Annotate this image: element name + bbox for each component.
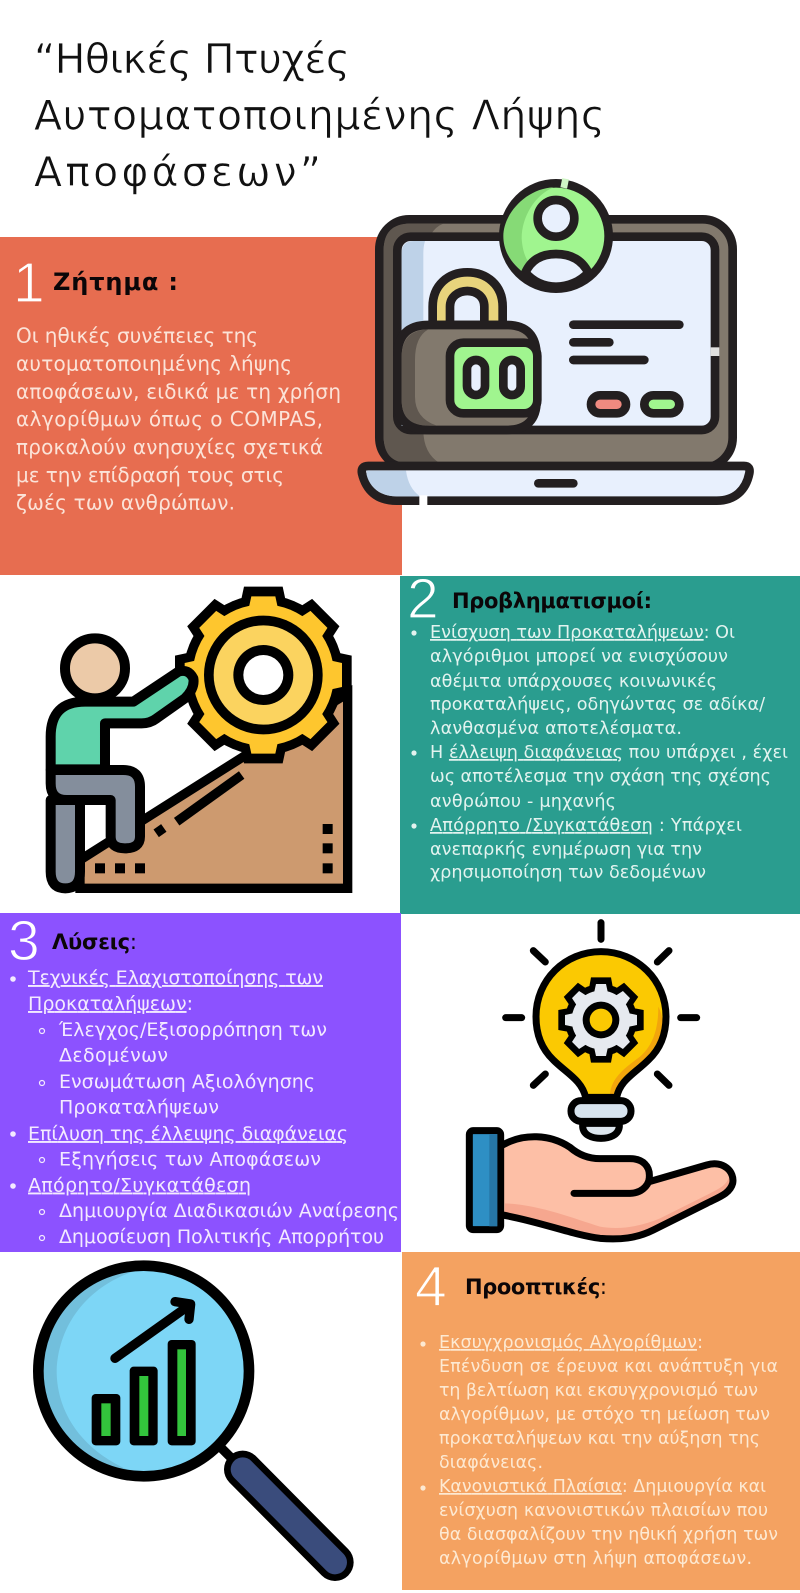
bullet list: outlook: προκαταλήψεων και την αύξηση της bbox=[439, 1429, 760, 1449]
bullet list: outlook: ενίσχυση κανονιστικών πλαισίων που bbox=[439, 1501, 768, 1521]
title: Αποφάσεων” bbox=[34, 148, 321, 196]
hand bbox=[469, 1131, 733, 1239]
bullet list: reflections: ανεπαρκής ενημέρωση για την bbox=[430, 840, 702, 860]
icon: person pushing gear up a hill bbox=[51, 587, 352, 888]
bullet list: solutions: Δημοσίευση Πολιτικής Απορρήτου bbox=[59, 1226, 384, 1248]
heading: outlook: Προοπτικές: bbox=[465, 1275, 607, 1299]
heading: solutions: Λύσεις: bbox=[52, 930, 137, 954]
number 2: 2 bbox=[407, 567, 439, 631]
bullet list: solutions: Έλεγχος/Εξισορρόπηση των bbox=[58, 1019, 327, 1041]
number 1: 1 bbox=[13, 251, 45, 315]
bullet list: reflections: Η έλλειψη διαφάνειας που υπάρχει , έχει bbox=[430, 743, 788, 763]
bullet list: solutions: Δεδομένων bbox=[59, 1044, 168, 1066]
bullet list: solutions: Απόρητο/Συγκατάθεση bbox=[28, 1174, 251, 1196]
screen buttons bbox=[591, 395, 679, 413]
hill bbox=[80, 693, 348, 888]
bullet list: outlook: Κανονιστικά Πλαίσια: Δημιουργία και bbox=[439, 1477, 766, 1497]
bullet list: solutions: Εξηγήσεις των Αποφάσεων bbox=[59, 1148, 321, 1170]
magnifier lens bbox=[38, 1266, 249, 1476]
text block: issue description: προκαλούν ανησυχίες σχετικά bbox=[16, 435, 323, 459]
text block: issue description: με την επίδρασή τους στις bbox=[16, 463, 284, 487]
person bbox=[51, 638, 194, 888]
text block: issue description: αυτοματοποιημένης λήψης bbox=[16, 352, 292, 376]
text block: issue description: αλγορίθμων όπως ο COMPAS, bbox=[16, 407, 323, 431]
bullet list: reflections: αλγόριθμοι μπορεί να ενισχύσουν bbox=[430, 647, 728, 667]
bullet list: solutions: Προκαταλήψεων bbox=[59, 1096, 219, 1118]
bullet list: reflections bbox=[411, 623, 788, 883]
bullet list: reflections: Ενίσχυση των Προκαταλήψεων: Οι bbox=[430, 623, 735, 643]
bullet list: solutions bbox=[10, 967, 399, 1248]
magnifier handle bbox=[220, 1447, 335, 1562]
text block: issue description: Οι ηθικές συνέπειες της bbox=[16, 324, 258, 348]
bar chart bbox=[92, 1340, 196, 1445]
title: “Ηθικές Πτυχές bbox=[34, 35, 350, 83]
padlock bbox=[397, 272, 537, 430]
panel: solutions bbox=[0, 909, 401, 1252]
bullet list: solutions: Προκαταλήψεων: bbox=[28, 993, 193, 1015]
text block: issue description: ζωές των ανθρώπων. bbox=[16, 490, 235, 514]
bullet list: reflections: αθέμιτα υπάρχουσες κοινωνικές bbox=[430, 672, 717, 692]
bullet list: outlook: αλγορίθμων στη λήψη αποφάσεων. bbox=[439, 1549, 752, 1569]
bullet list: outlook: αλγορίθμων, με στόχο τη μείωση των bbox=[439, 1405, 770, 1425]
base of laptop bbox=[362, 466, 750, 506]
bulb bbox=[536, 952, 666, 1138]
light rays bbox=[506, 923, 697, 1085]
heading: reflections: Προβληματισμοί: bbox=[452, 589, 652, 613]
bullet list: reflections: χρησιμοποίηση των δεδομένων bbox=[430, 863, 706, 883]
text block: issue description bbox=[16, 324, 341, 514]
number 4: 4 bbox=[415, 1255, 447, 1319]
panel: issue bbox=[0, 237, 402, 575]
title: Αυτοματοποιημένης Λήψης bbox=[34, 92, 605, 140]
panel: outlook bbox=[402, 1252, 800, 1590]
icon: light bulb with gear over hand bbox=[469, 923, 733, 1239]
bullet list: outlook: Επένδυση σε έρευνα και ανάπτυξη για bbox=[439, 1357, 778, 1377]
bullet list: solutions: Επίλυση της έλλειψης διαφάνειας bbox=[28, 1123, 348, 1145]
bullet list: reflections: προκαταλήψεις, οδηγώντας σε αδίκα/ bbox=[430, 695, 765, 715]
user badge bbox=[503, 183, 609, 289]
text block: issue description: αποφάσεων, ειδικά με τη χρήση bbox=[16, 380, 341, 404]
bullet list: reflections: λανθασμένα αποτελέσματα. bbox=[430, 719, 682, 739]
bulb gear bbox=[558, 977, 644, 1063]
bullet list: reflections: ανθρώπου - μηχανής bbox=[430, 792, 616, 812]
bullet list: outlook: θα διασφαλίζουν την ηθική χρήση των bbox=[439, 1525, 778, 1545]
bullet list: solutions: Ενσωμάτωση Αξιολόγησης bbox=[59, 1071, 315, 1093]
bullet list: outlook: τη βελτίωση και εκσυγχρονισμό των bbox=[439, 1381, 758, 1401]
bullet list: reflections: Απόρρητο /Συγκατάθεση : Υπάρχει bbox=[430, 816, 742, 836]
bullet list: outlook: Εκσυγχρονισμός Αλγορίθμων: bbox=[439, 1333, 703, 1353]
bullet list: solutions: Δημιουργία Διαδικασιών Αναίρεσης bbox=[59, 1200, 399, 1222]
bullet list: reflections: ως αποτέλεσμα την σχάση της σχέσης bbox=[430, 767, 771, 787]
bullet list: outlook: διαφάνειας. bbox=[439, 1453, 543, 1473]
heading: issue: Ζήτημα : bbox=[53, 268, 178, 296]
title bbox=[34, 35, 605, 196]
screen text lines bbox=[573, 325, 679, 360]
bullet list: outlook bbox=[420, 1333, 778, 1569]
icon: magnifying glass with rising bar chart bbox=[38, 1266, 335, 1562]
panel: reflections bbox=[400, 567, 800, 914]
bullet list: solutions: Τεχνικές Ελαχιστοποίησης των bbox=[27, 967, 323, 989]
icon: laptop with lock and user bbox=[362, 183, 750, 506]
gear bbox=[175, 587, 352, 763]
trend arrow bbox=[115, 1302, 191, 1358]
number 3: 3 bbox=[8, 909, 40, 973]
